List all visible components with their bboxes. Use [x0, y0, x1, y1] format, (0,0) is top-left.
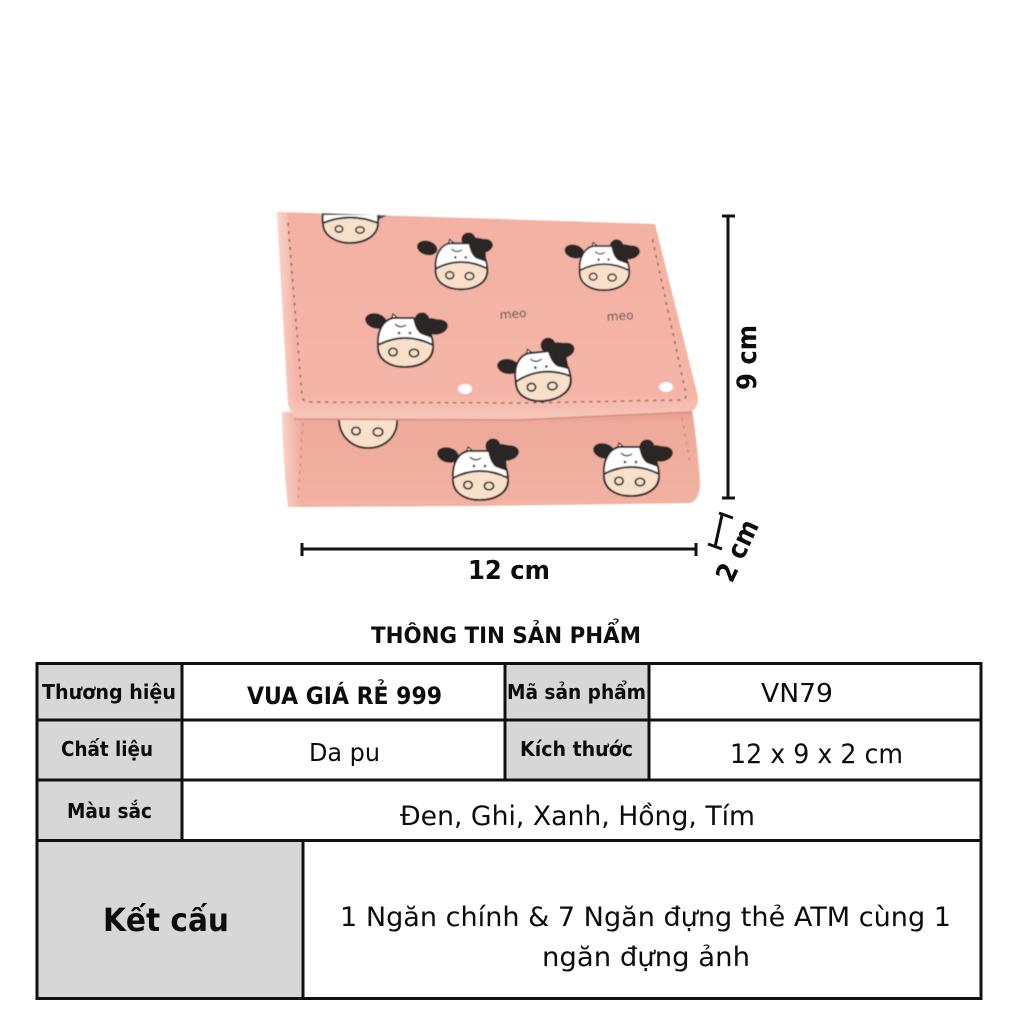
value: structure line 2: ngăn đựng ảnh — [542, 942, 750, 973]
cropped cow at flap top — [323, 214, 388, 243]
flap shadow line — [294, 412, 692, 420]
heading: THÔNG TIN SẢN PHẨM — [371, 620, 641, 649]
cow middle left — [363, 311, 449, 367]
label: size: Kích thước — [520, 737, 633, 761]
label: colour: Màu sắc — [67, 799, 152, 823]
value: product code: VN79 — [761, 679, 833, 709]
value: brand: VUA GIÁ RẺ 999 — [247, 677, 442, 710]
cow on lower body right — [591, 440, 674, 496]
cow top right — [563, 239, 641, 290]
value: structure line 1: 1 Ngăn chính & 7 Ngăn đựng thẻ ATM cùng 1 — [340, 902, 951, 933]
lower body left highlight — [282, 412, 301, 507]
label cell backgrounds — [37, 664, 649, 999]
value: colours: Đen, Ghi, Xanh, Hồng, Tím — [400, 801, 755, 832]
flap left highlight — [277, 212, 297, 420]
dimension: height 9 cm — [722, 216, 763, 498]
label: product code: Mã sản phẩm — [507, 680, 646, 704]
table grid — [37, 664, 981, 999]
wallet lower body — [282, 410, 700, 507]
wallet photo — [277, 212, 700, 507]
white snap dot left — [458, 384, 472, 394]
dimension: depth 2 cm: 2 cm — [710, 515, 766, 587]
cow on lower body left — [435, 438, 520, 500]
dimension: width 12 cm: 12 cm — [468, 556, 550, 586]
meo print right: meo — [606, 308, 634, 324]
partial cow under flap — [339, 419, 397, 448]
dimension: height 9 cm: 9 cm — [732, 325, 763, 390]
label: brand: Thương hiệu — [42, 680, 176, 704]
meo print left: meo — [499, 306, 527, 322]
dimension: width 12 cm — [302, 543, 696, 586]
wallet flap — [277, 212, 698, 420]
product information table — [37, 664, 981, 999]
cow middle right — [493, 335, 581, 406]
flap stitching — [288, 223, 686, 403]
white snap dot right — [659, 382, 673, 392]
label: structure: Kết cấu — [103, 901, 229, 939]
label: material: Chất liệu — [61, 737, 153, 761]
lower body stitching — [298, 418, 690, 503]
value: material: Da pu — [309, 738, 380, 767]
value: size: 12 x 9 x 2 cm — [730, 739, 903, 770]
cow top middle — [415, 232, 494, 289]
